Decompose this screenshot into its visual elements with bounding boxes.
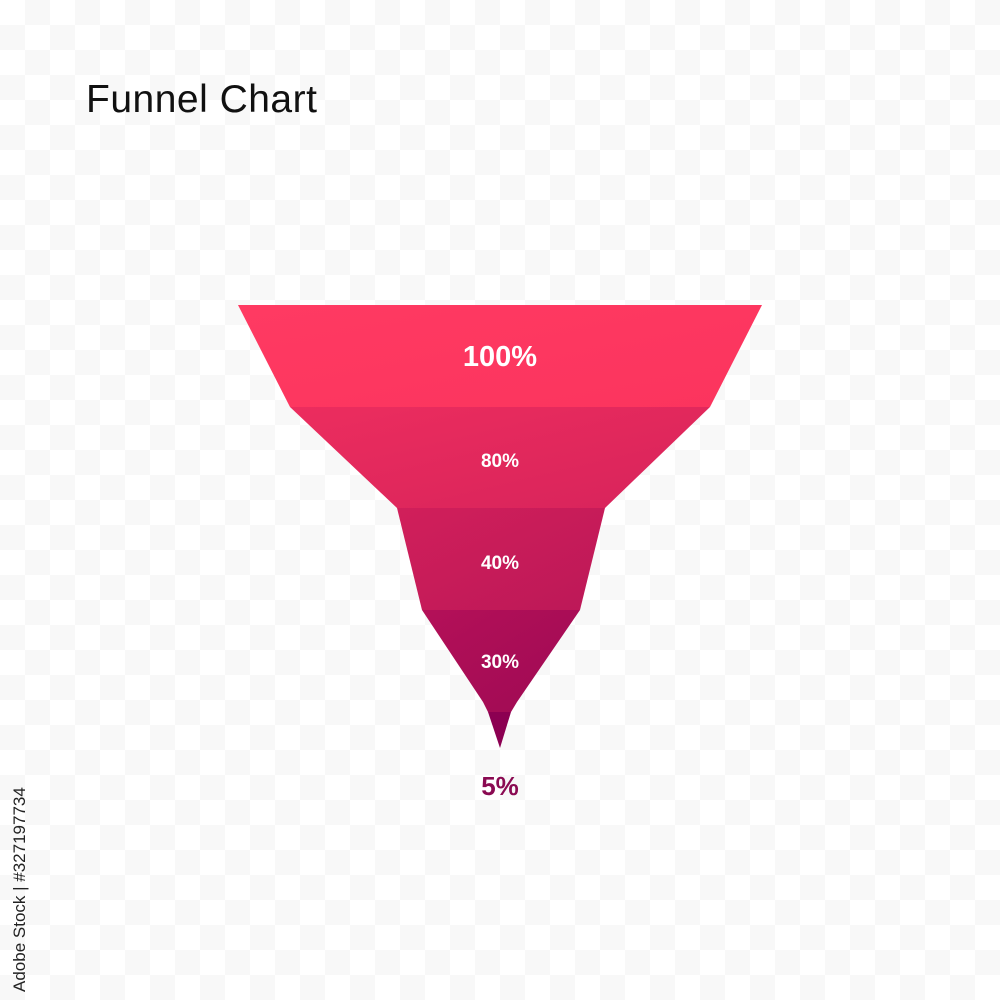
band 80% bbox=[290, 407, 710, 508]
band 5% tip bbox=[488, 712, 511, 748]
band 30% bbox=[422, 610, 580, 712]
band 40%: 40% bbox=[481, 553, 519, 574]
label 5%: 5% bbox=[481, 771, 519, 801]
watermark id: Adobe Stock | #327197734 bbox=[10, 787, 29, 992]
band 100%: 100% bbox=[463, 341, 537, 373]
band 30%: 30% bbox=[481, 652, 519, 673]
band 40% bbox=[397, 508, 605, 610]
band 80%: 80% bbox=[481, 451, 519, 472]
title: Funnel Chart bbox=[86, 78, 317, 121]
band 100% bbox=[238, 305, 762, 407]
